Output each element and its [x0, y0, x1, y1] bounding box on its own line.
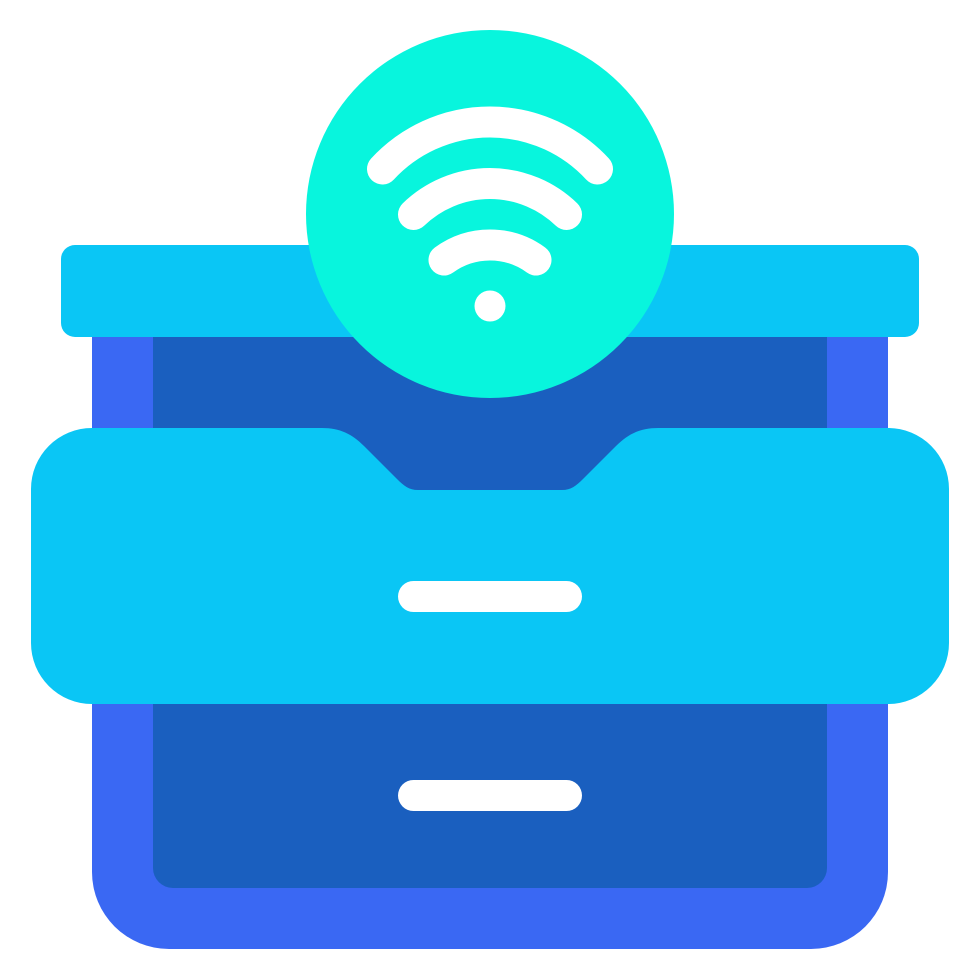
- top drawer: [31, 428, 949, 704]
- bottom drawer handle: [398, 780, 582, 811]
- cabinet body: [92, 320, 888, 949]
- icon: wifi signal: [382, 122, 598, 322]
- top drawer handle: [398, 581, 582, 612]
- cabinet inner panel: [153, 320, 827, 888]
- cabinet lid: [61, 245, 919, 337]
- wifi badge: [306, 30, 674, 398]
